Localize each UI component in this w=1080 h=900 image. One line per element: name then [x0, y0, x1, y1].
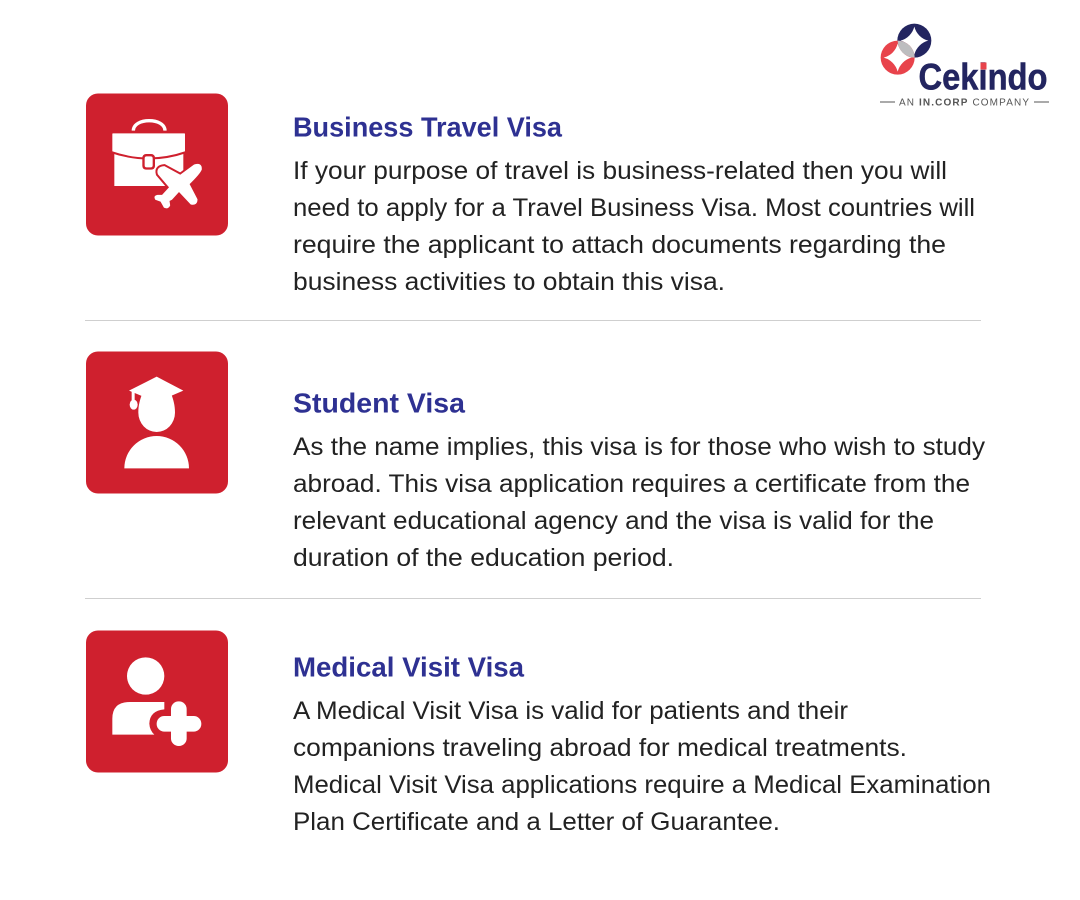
- heading: Business Travel Visa: [293, 112, 562, 142]
- body text: If your purpose of travel is business-related then you will: [293, 157, 947, 185]
- heading: Medical Visit Visa: [293, 652, 524, 682]
- body text: Medical Visit Visa applications require a Medical Examination: [293, 771, 991, 799]
- body text: companions traveling abroad for medical treatments.: [293, 734, 907, 762]
- body text: need to apply for a Travel Business Visa. Most countries will: [293, 194, 975, 222]
- body text: As the name implies, this visa is for those who wish to study: [293, 433, 986, 461]
- logo wordmark: Cekindo: [918, 56, 1048, 98]
- body text: [293, 157, 975, 296]
- heading: Student Visa: [293, 388, 465, 418]
- logo mark: overlapping circles: [881, 24, 931, 75]
- panel: Student Visa: [86, 352, 986, 572]
- body text: abroad. This visa application requires a certificate from the: [293, 470, 970, 498]
- body text: Plan Certificate and a Letter of Guarantee.: [293, 808, 780, 836]
- logo: Cekindo: [880, 24, 1049, 109]
- body text: business activities to obtain this visa.: [293, 268, 725, 296]
- body text: relevant educational agency and the visa is valid for the: [293, 507, 934, 535]
- logo tagline: AN IN.CORP COMPANY: [899, 98, 1029, 108]
- body text: A Medical Visit Visa is valid for patients and their: [293, 697, 848, 725]
- icon: graduate: [86, 352, 228, 494]
- body text: [293, 433, 986, 572]
- body text: require the applicant to attach documents regarding the: [293, 231, 946, 259]
- icon: briefcase and plane: [86, 94, 228, 236]
- icon: person with plus: [86, 630, 228, 772]
- body text: duration of the education period.: [293, 544, 674, 572]
- panel: Medical Visit Visa: [86, 630, 991, 836]
- panel: Business Travel Visa: [86, 94, 975, 296]
- body text: [293, 697, 991, 836]
